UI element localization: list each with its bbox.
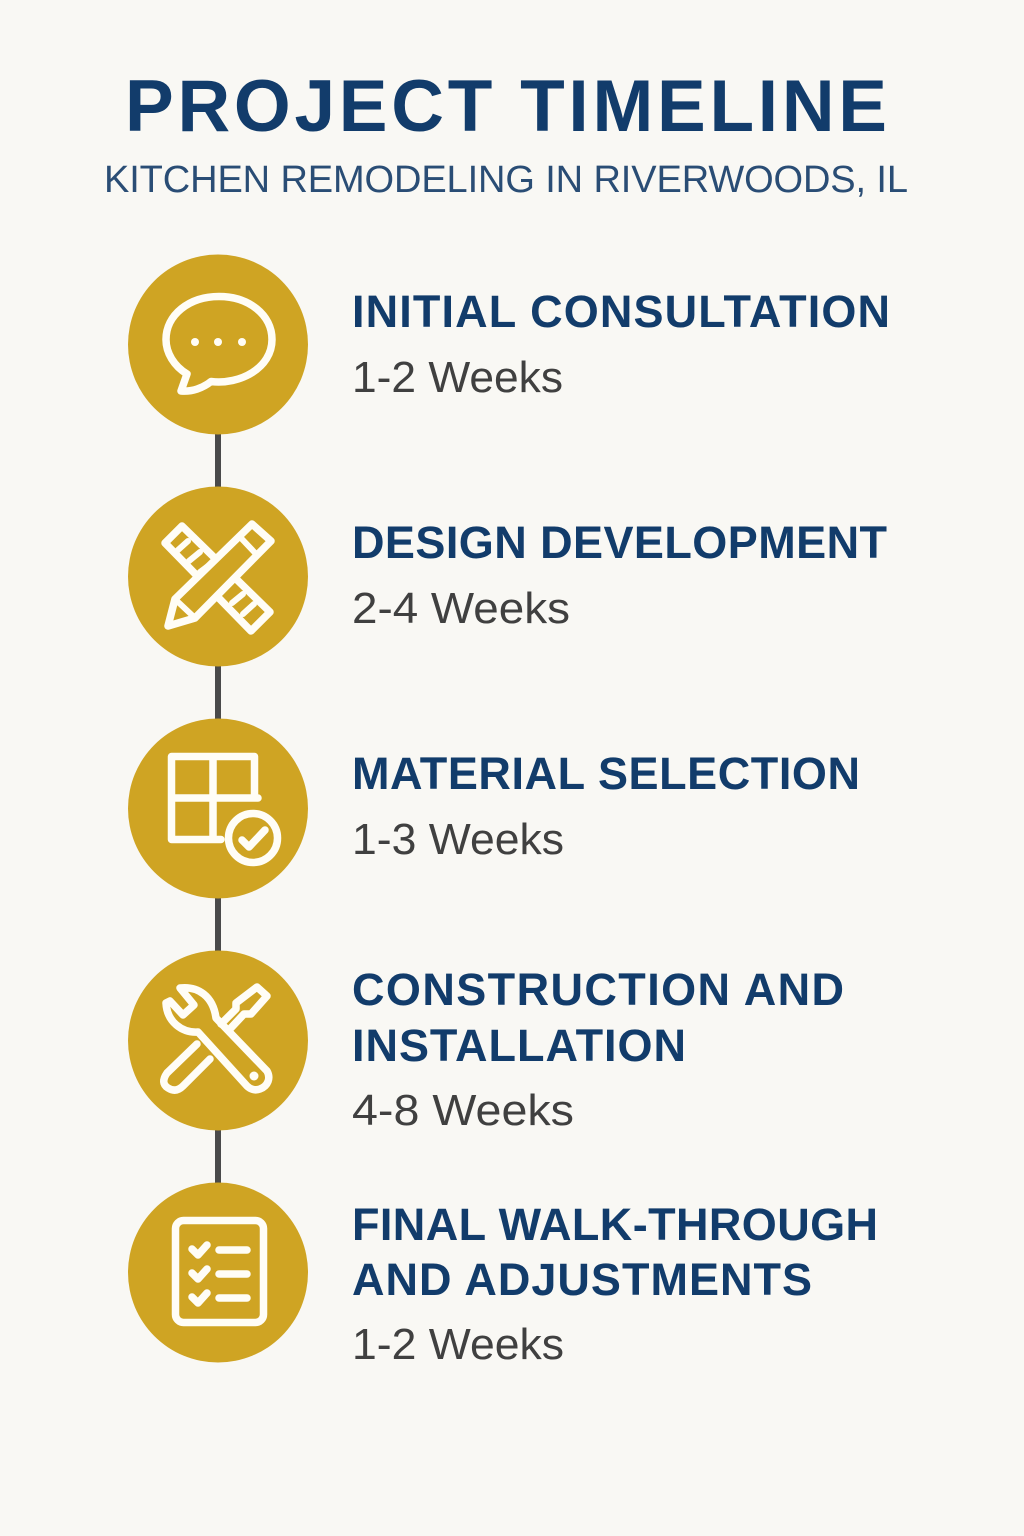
step 5: final walk-through and adjustments (128, 1182, 878, 1369)
step 2 duration: 2-4 Weeks (352, 584, 570, 633)
step 5 circle (128, 1182, 308, 1362)
step 1 heading: INITIAL CONSULTATION (352, 286, 890, 337)
step 4: construction and installation (128, 950, 844, 1135)
step 5 heading second line: AND ADJUSTMENTS (352, 1254, 812, 1305)
step 3: material selection (128, 718, 860, 898)
step 1: initial consultation (128, 254, 890, 434)
step 4 duration: 4-8 Weeks (352, 1086, 574, 1135)
step 1 circle (128, 254, 308, 434)
icon: checklist (176, 1220, 264, 1322)
icon: ruler and pencil (165, 524, 271, 631)
step 2 heading: DESIGN DEVELOPMENT (352, 517, 887, 568)
timeline connector lines (215, 430, 221, 1186)
title: PROJECT TIMELINE (125, 66, 887, 147)
step 4 heading: CONSTRUCTION AND (352, 964, 844, 1015)
step 2 circle (128, 486, 308, 666)
step 3 duration: 1-3 Weeks (352, 815, 564, 864)
step 2: design development (128, 486, 887, 666)
icon: wrench and screwdriver (164, 987, 269, 1090)
step 4 heading second line: INSTALLATION (352, 1020, 686, 1071)
step 5 heading: FINAL WALK-THROUGH (352, 1199, 878, 1250)
step 5 duration: 1-2 Weeks (352, 1320, 564, 1369)
step 3 circle (128, 718, 308, 898)
step 3 heading: MATERIAL SELECTION (352, 748, 860, 799)
step 4 circle (128, 950, 308, 1130)
icon: tile grid with check (172, 756, 278, 862)
step 1 duration: 1-2 Weeks (352, 353, 563, 402)
subtitle: KITCHEN REMODELING IN RIVERWOODS, IL (104, 159, 908, 201)
icon: speech bubble (166, 296, 272, 391)
